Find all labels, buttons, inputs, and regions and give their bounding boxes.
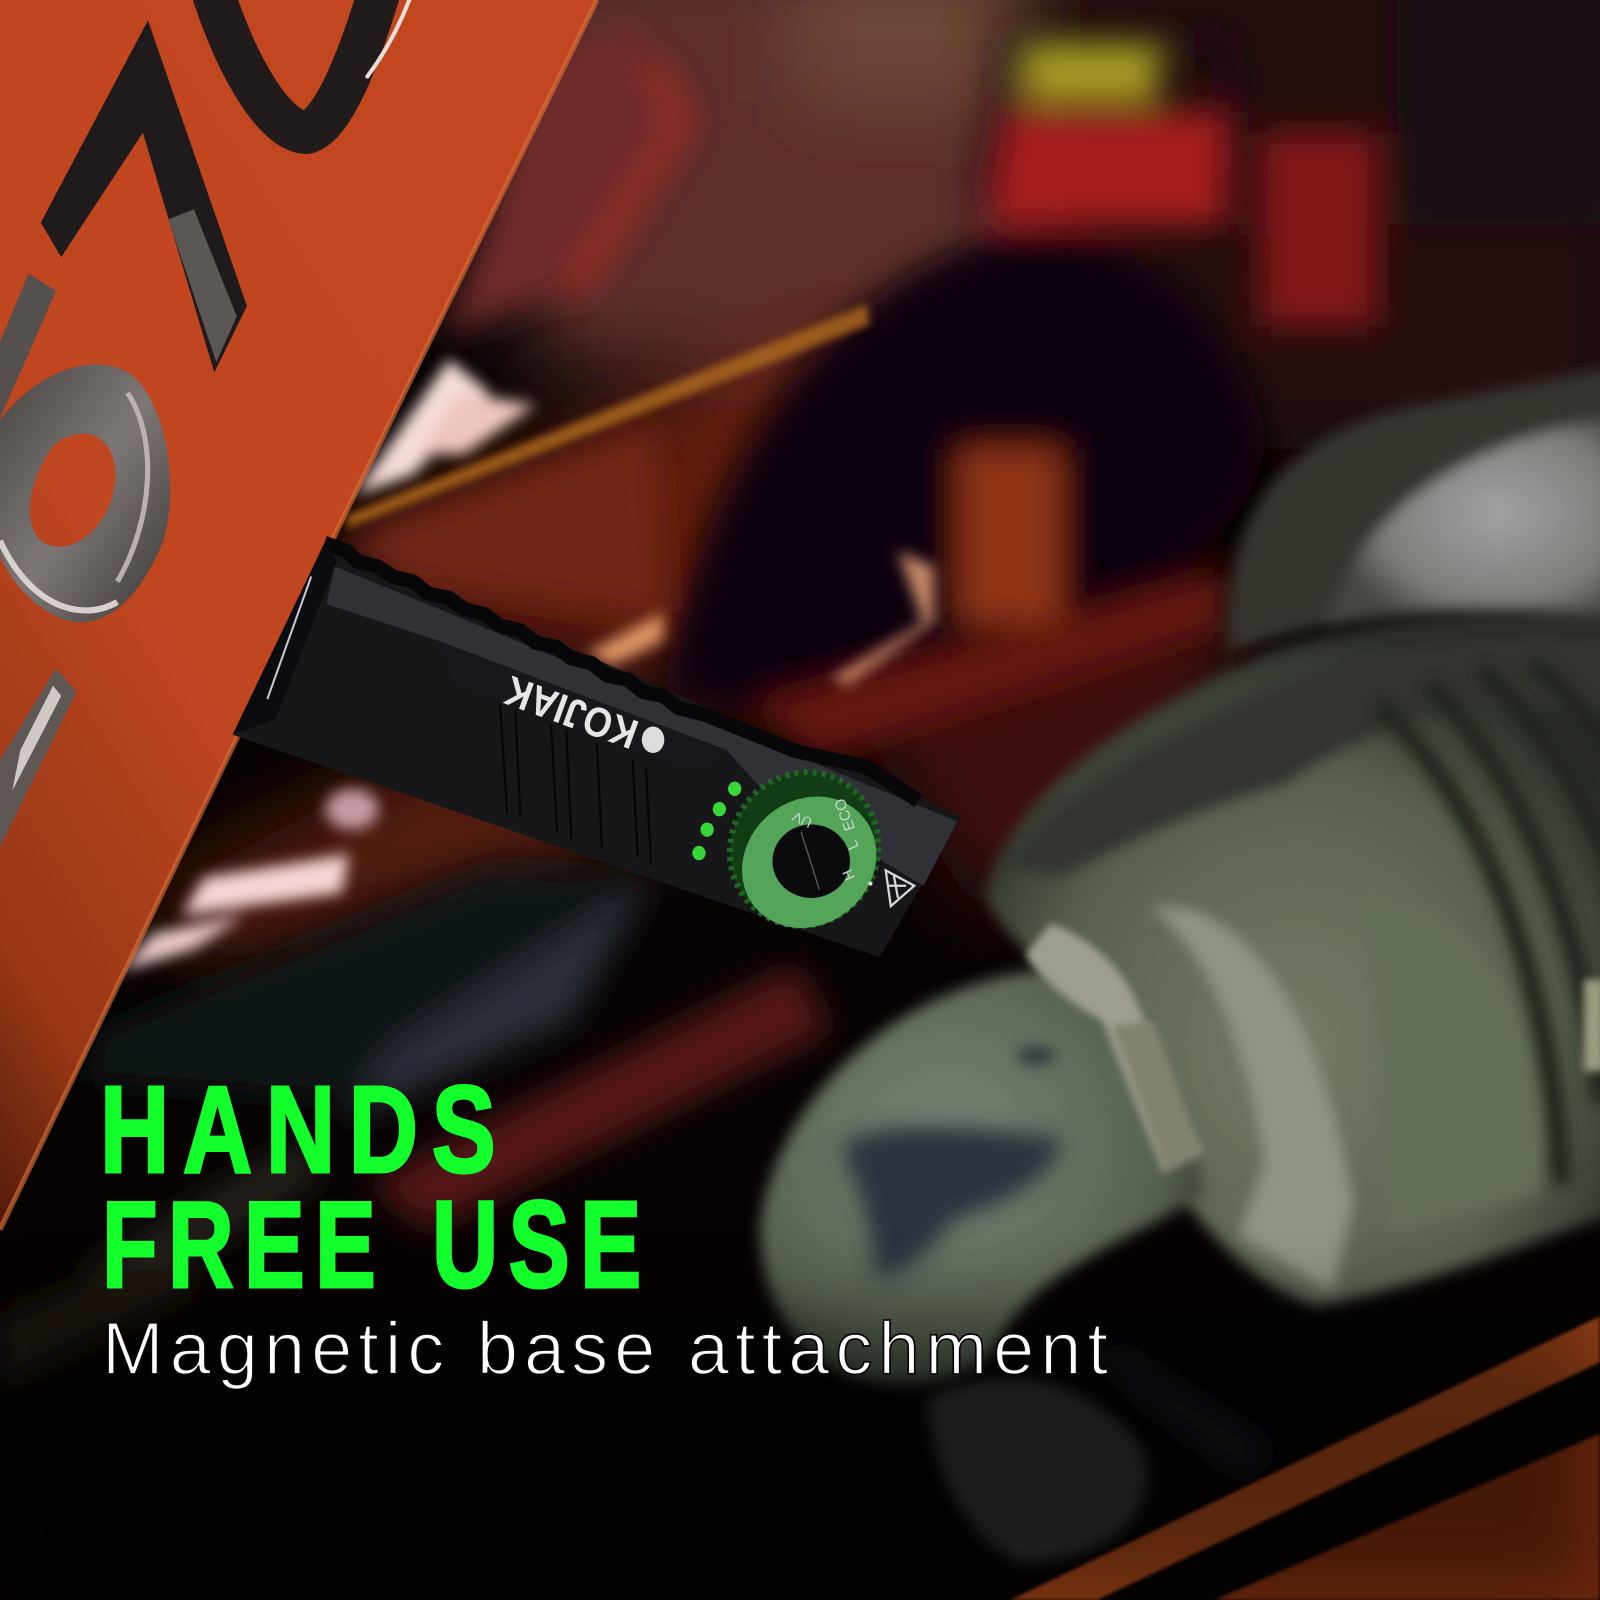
- flashlight top face: [327, 566, 957, 886]
- icon: triangle badge: [868, 870, 914, 906]
- status LEDs: [692, 782, 741, 860]
- hose clamp: [1026, 923, 1204, 1173]
- chrome badge: seven shape: [41, 20, 247, 372]
- chrome badge: top curve: [209, 0, 411, 133]
- highlights: pale reflections: [120, 359, 934, 971]
- hose: elbow: [760, 969, 1204, 1561]
- flashlight: [233, 543, 961, 957]
- mode dial: H: [840, 867, 859, 883]
- logo text: KOJIAK: [498, 667, 644, 758]
- panel edge highlight: [0, 0, 597, 1230]
- flashlight logo plate: [437, 641, 724, 771]
- chrome badge: lower bar: [0, 668, 77, 847]
- hose: large ribbed pipe: [985, 615, 1600, 1306]
- chrome badge: six shape: [0, 273, 170, 623]
- orange line across background: [347, 304, 869, 529]
- dial mode labels: UV: [790, 807, 815, 830]
- flashlight base end: [233, 543, 337, 735]
- blurred background: upper maroon wall: [153, 0, 1600, 969]
- flashlight ribbed top edge: [324, 543, 918, 801]
- title: [100, 1062, 652, 1313]
- mode dial: [705, 748, 903, 955]
- icon: logo paw: [642, 727, 664, 753]
- flashlight body: [233, 543, 961, 957]
- dark vignette behind lower text: [0, 1316, 1600, 1600]
- orange body panel: [0, 0, 597, 1230]
- title: FREE: [102, 1176, 386, 1313]
- hose: dome upper right: [1229, 367, 1600, 653]
- hose ribs: [1378, 663, 1600, 1184]
- flashlight end highlight: [267, 577, 311, 699]
- title: HANDS: [100, 1062, 509, 1199]
- orange bars lower right: [1010, 1316, 1600, 1600]
- elbow: blue smudge: [842, 1127, 1061, 1277]
- subtitle: Magnetic base attachment: [102, 1307, 1108, 1390]
- title: USE: [432, 1176, 652, 1313]
- hose: beige strip right edge: [1584, 980, 1600, 1071]
- mode dial: ECO: [832, 796, 859, 833]
- flashlight vertical grooves: [500, 704, 651, 865]
- mode dial: L: [844, 838, 863, 852]
